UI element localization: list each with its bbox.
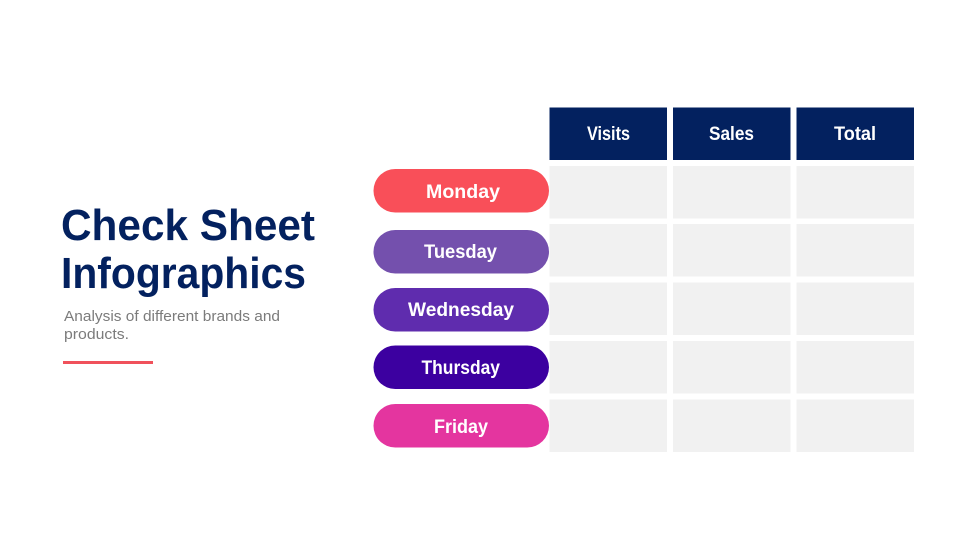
column header: Total (796, 108, 914, 160)
row label: Thursday: Thursday (422, 358, 500, 379)
column header: Sales (673, 108, 790, 160)
row label: Monday (374, 169, 549, 212)
row label: Friday: Friday (434, 417, 488, 438)
accent underline (63, 361, 153, 364)
title (61, 201, 315, 298)
column header: Visits (550, 108, 667, 160)
table (550, 108, 914, 452)
column header: Visits: Visits (587, 124, 630, 145)
row label: Wednesday (374, 288, 549, 332)
title: Infographics (61, 249, 306, 298)
title: Check Sheet (61, 201, 315, 250)
row label: Wednesday: Wednesday (408, 300, 514, 321)
row label: Tuesday (374, 230, 549, 274)
subtitle text: Analysis of different brands and (64, 308, 280, 325)
column header: Sales: Sales (709, 124, 754, 145)
row label: Tuesday: Tuesday (424, 242, 497, 263)
subtitle text (64, 308, 280, 343)
row label: Friday (374, 404, 549, 448)
column header: Total: Total (834, 124, 876, 145)
subtitle text: products. (64, 326, 129, 343)
empty check cells (550, 166, 914, 452)
row label: Monday: Monday (426, 182, 500, 203)
row label: Thursday (374, 346, 549, 389)
